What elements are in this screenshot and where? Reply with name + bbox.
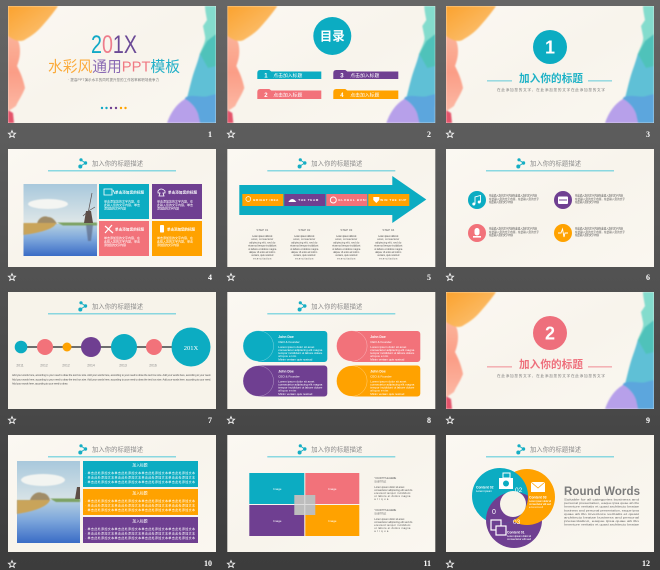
bar: orange: 加入标题 <box>132 490 148 496</box>
quadrant tiles: Image <box>328 487 337 491</box>
paragraph: Add your words here, according to your need to draw the text box size. Add your words here, according to your need to draw the text box size. Add your words here, according to your need. <box>12 373 211 377</box>
step 1 text: adipiscing elit, sed do <box>249 240 276 244</box>
step 3 text: adipiscing elit, sed do <box>333 240 360 244</box>
ring diagram: consectetur elit sed <box>529 502 551 506</box>
footer: star icon 2 <box>227 131 235 137</box>
ring diagram: Lorem ipsum <box>476 489 492 493</box>
year labels <box>16 364 157 368</box>
footer: star icon 12 <box>446 561 454 567</box>
Round Words body: business and personal presentation, eaque ipsa <box>564 508 639 512</box>
slide 11: quadrant <box>227 435 435 552</box>
item: music: 在此输入您的文字内容，在此输入您的文字 <box>489 197 539 201</box>
tile: teal: 单击添加您的文字内容，在 <box>104 198 140 204</box>
item 4: 点击加入标题 <box>350 92 380 98</box>
card teal: John Doe <box>278 335 294 339</box>
card orange: tempor incididunt ut labore dolore <box>370 386 415 390</box>
page number 10: 10 <box>204 559 212 568</box>
header: 加入你的标题描述 <box>92 444 144 453</box>
year labels: 2016 <box>149 364 157 368</box>
title 201X: 201X <box>91 31 137 59</box>
item: music: 在此输入您的文字内容 <box>489 200 513 204</box>
text block 1: ut labore et dolore magna <box>374 494 411 498</box>
tile: orange: 此输入您的文字内容，单击 <box>157 238 193 244</box>
number circle: 1 <box>545 38 555 58</box>
page number 9: 9 <box>646 416 650 425</box>
step 1 text: aliqua. Ut enim ad minim <box>249 250 275 254</box>
center overlay <box>294 495 315 515</box>
text block 1: YOUR TITLE HERE <box>374 476 396 480</box>
Round Words body: presentation, eaque ipsa quae ab illo <box>564 519 639 523</box>
ring diagram: 03 <box>513 519 521 526</box>
page number 3: 3 <box>646 130 650 139</box>
tile: orange: 单击添加您的标题 <box>167 226 196 232</box>
Round Words body: personal presentation, eaque ipsa quae ab illo <box>564 501 639 505</box>
ring diagram: Content 02 <box>476 486 494 490</box>
year labels: 2012 <box>62 364 70 368</box>
paragraph: Add your words here, according to your need to draw. <box>12 382 68 386</box>
header <box>486 444 614 457</box>
timeline: 201X <box>184 345 199 352</box>
ring diagram: Lorem ipsum dolor sit <box>529 499 551 503</box>
text block 2: Lorem ipsum dolor sit amet <box>374 517 405 521</box>
bar: teal <box>83 461 198 487</box>
header <box>48 158 176 171</box>
step 4 text: veniam, quis nostrud <box>377 253 400 257</box>
step 4 text: amet, consectetur <box>377 237 399 241</box>
item 3 <box>333 70 398 80</box>
step 3 text: exercitation <box>337 256 356 260</box>
step box 3: GLOBAL BUSI <box>338 198 366 202</box>
step 3 text: amet, consectetur <box>335 237 357 241</box>
Round Words body <box>564 498 639 527</box>
tile: teal: 添加您的文字内容 <box>104 206 126 210</box>
card salmon <box>336 331 420 362</box>
page number 2: 2 <box>427 130 431 139</box>
step 2 text: adipiscing elit, sed do <box>291 240 318 244</box>
bar: teal: · 单击此处添加文本单击此处添加文本单击此处添加文本单击此处添加文本 <box>85 479 195 484</box>
slide 5: arrow steps <box>227 149 435 267</box>
step 1 text: veniam, quis nostrud <box>251 253 274 257</box>
step 3 text: ut labore et dolore magna <box>332 247 361 251</box>
tile: salmon: 添加您的文字内容 <box>104 242 126 247</box>
text block 2: eiusmod tempor incididunt <box>374 523 411 527</box>
tile: teal <box>99 184 149 219</box>
card teal <box>243 331 327 362</box>
tile: salmon: 此输入您的文字内容，单击 <box>104 238 140 244</box>
step 3 text: eiusmod tempor incididunt <box>332 244 361 248</box>
ring diagram: Content 01 <box>507 530 525 534</box>
text block 2: aliqua <box>374 529 389 533</box>
card salmon: tempor incididunt ut labore dolore <box>370 351 415 355</box>
text block 1 <box>374 476 413 501</box>
header <box>486 158 614 171</box>
item: microphone: 在此输入您的文字内容，在此输入您的文字 <box>489 230 539 234</box>
text block 1: eiusmod tempor incididunt <box>374 491 411 495</box>
step 1 text <box>248 228 277 260</box>
bar: purple: · 单击此处添加文本单击此处添加文本单击此处添加文本单击此处添加文本 <box>85 526 195 531</box>
year labels: 2014 <box>87 364 95 368</box>
ring diagram: Lorem ipsum dolor sit <box>507 534 531 538</box>
item: mail: 在此输入您的文字内容，在此输入您的文字 <box>575 197 625 201</box>
step 3 text: veniam, quis nostrud <box>335 253 358 257</box>
item: pulse: 在此输入您的文字内容 <box>575 233 599 237</box>
card purple: aliqua enim <box>278 388 297 392</box>
card salmon: Lorem ipsum dolor sit amet <box>370 345 406 349</box>
photo: windmill landscape <box>24 184 97 256</box>
card salmon: consectetur adipiscing elit magna <box>370 348 415 352</box>
card purple: Lorem ipsum dolor sit amet <box>278 380 314 384</box>
item: pulse: 在此输入您的文字内容在此输入您的文字内容 <box>575 226 623 230</box>
bar: purple: 加入标题 <box>132 518 148 524</box>
ring diagram: Content 03 <box>529 496 547 500</box>
page number 4: 4 <box>208 273 212 282</box>
section description: 在此添加您的文字，在此添加您的文字在此添加您的文字 <box>497 373 605 378</box>
footer: star icon 10 <box>8 561 16 567</box>
Round Words heading: Round Words <box>564 486 640 498</box>
subtitle: · 提高PPT演示水平的同时提升您的工作效率和职场竞争力 <box>68 77 160 82</box>
paper <box>446 435 654 552</box>
Round Words body: Inventore veritatis et quasi architecto beatae <box>564 523 639 527</box>
tile: purple: 单击添加您的文字内容，在 <box>157 198 193 204</box>
page number 1: 1 <box>208 130 212 139</box>
card orange: Minim veniam quis nostrud <box>370 392 405 396</box>
bar: purple <box>83 517 198 543</box>
step 3 text: Lorem ipsum dolor sit <box>336 234 357 238</box>
paper <box>8 149 216 267</box>
item: mail <box>554 191 625 209</box>
bar: orange: · 单击此处添加文本单击此处添加文本单击此处添加文本单击此处添加文本 <box>85 498 195 503</box>
card orange <box>336 366 420 396</box>
card purple: Minim veniam quis nostrud <box>278 392 313 396</box>
item 2: 2 <box>264 93 268 99</box>
text block 2 <box>374 508 413 533</box>
card teal: Minim veniam quis nostrud <box>278 357 313 361</box>
item 2: 点击加入标题 <box>273 92 303 98</box>
card orange: consectetur adipiscing elit magna <box>370 382 415 386</box>
main title: 水彩风通用PPT模板 <box>48 58 180 76</box>
footer: star icon 8 <box>227 417 235 423</box>
tile: teal: 此输入您的文字内容，单击 <box>104 202 140 207</box>
tile: orange: 单击添加您的文字内容，在 <box>157 235 193 240</box>
header <box>267 444 395 457</box>
step 4 text: Lorem ipsum dolor sit <box>378 234 399 238</box>
watercolor background <box>446 6 654 123</box>
card teal: aliqua enim <box>278 354 297 358</box>
page number 6: 6 <box>646 273 650 282</box>
header: 加入你的标题描述 <box>530 444 582 453</box>
footer: star icon 11 <box>227 561 235 567</box>
tile: salmon: 单击添加您的文字内容，在 <box>104 235 140 240</box>
paper <box>446 149 654 267</box>
footer: star icon 5 <box>227 274 235 280</box>
Round Words body: Suitable for all categories business and <box>564 498 639 502</box>
number circle: 2 <box>545 324 555 344</box>
footer: star icon 7 <box>8 417 16 423</box>
step box 1: BRIGHT IDEA <box>253 198 279 202</box>
header: 加入你的标题描述 <box>311 158 363 167</box>
card salmon: aliqua enim <box>370 354 389 358</box>
text block 2: ut labore et dolore magna <box>374 526 411 530</box>
header: 加入你的标题描述 <box>92 158 144 167</box>
year labels: 2011 <box>16 364 24 368</box>
tile: salmon <box>99 221 149 256</box>
header <box>48 301 176 314</box>
page number 7: 7 <box>208 416 212 425</box>
step box 4 <box>368 194 409 206</box>
card teal: tempor incididunt ut labore dolore <box>278 351 323 355</box>
slide 9: section 2 <box>446 292 654 409</box>
item: mail: 在此输入您的文字内容 <box>575 200 599 204</box>
page number 11: 11 <box>423 559 431 568</box>
step box 2: THE TEAM <box>298 198 319 202</box>
header: 加入你的标题描述 <box>530 158 582 167</box>
slide 10: photo and bars <box>8 435 216 552</box>
footer: star icon 3 <box>446 131 454 137</box>
bar: orange: · 单击此处添加文本单击此处添加文本单击此处添加文本单击此处添加文本 <box>85 507 195 512</box>
text block 2: YOUR TITLE HERE <box>374 508 396 512</box>
item 1: 1 <box>264 74 268 80</box>
header <box>267 301 395 314</box>
slide 1: cover <box>8 6 216 123</box>
watercolor background <box>227 6 435 123</box>
step 1 text: Lorem ipsum dolor sit <box>252 234 273 238</box>
card salmon: Minim veniam quis nostrud <box>370 357 405 361</box>
bar: orange: · 单击此处添加文本单击此处添加文本单击此处添加文本单击此处添加文本 <box>85 502 195 508</box>
card teal: consectetur adipiscing elit magna <box>278 348 323 352</box>
step 2 text <box>290 228 319 260</box>
step 2 text: STEP 02 <box>298 228 311 232</box>
item: microphone: 在此输入您的文字内容在此输入您的文字内容 <box>489 226 537 230</box>
section heading: 加入你的标题 <box>519 358 583 371</box>
text block 1: Lorem ipsum dolor sit amet <box>374 485 405 489</box>
ring diagram: eiusmod <box>529 505 543 509</box>
card orange: John Doe <box>370 370 386 374</box>
item 4: 4 <box>340 93 344 99</box>
step 4 text: ut labore et dolore magna <box>374 247 403 251</box>
tile: orange <box>152 221 202 256</box>
number circle <box>533 316 567 350</box>
header: 加入你的标题描述 <box>311 301 363 310</box>
big arrow <box>239 176 426 223</box>
page number 12: 12 <box>642 559 650 568</box>
item: microphone <box>468 224 539 242</box>
step 3 text: aliqua. Ut enim ad minim <box>333 250 359 254</box>
item: mail: 在此输入您的文字内容在此输入您的文字内容 <box>575 194 623 198</box>
step 4 text: eiusmod tempor incididunt <box>374 244 403 248</box>
card teal: CEO & Founder <box>278 340 300 344</box>
watercolor background <box>446 292 654 409</box>
Round Words body: quae ab illo inventore veritatis et quasi <box>564 512 639 516</box>
page number 5: 5 <box>427 273 431 282</box>
quadrant tiles: Image <box>328 519 337 523</box>
step 4 text: exercitation <box>379 256 398 260</box>
step 2 text: aliqua. Ut enim ad minim <box>291 250 317 254</box>
step 1 text: ut labore et dolore magna <box>248 247 277 251</box>
ring diagram: 0 <box>492 509 496 516</box>
item: pulse <box>554 224 625 242</box>
item 3: 3 <box>340 74 344 80</box>
tile: purple: 添加您的文字内容 <box>157 206 179 210</box>
footer: star icon 9 <box>446 417 454 423</box>
card purple: CEO & Founder <box>278 374 300 378</box>
header: 加入你的标题描述 <box>311 444 363 453</box>
step 4 text: STEP 04 <box>382 228 395 232</box>
year labels: 2012 <box>40 364 48 368</box>
slide 6: four icons <box>446 149 654 267</box>
card purple <box>243 366 327 396</box>
step 3 text <box>332 228 361 260</box>
paper <box>8 292 216 409</box>
bar: teal: · 单击此处添加文本单击此处添加文本单击此处添加文本单击此处添加文本 <box>85 474 195 480</box>
watercolor background <box>8 6 216 123</box>
slide 7: timeline <box>8 292 216 409</box>
step 1 text: amet, consectetur <box>251 237 273 241</box>
slide 12: round words <box>446 435 654 552</box>
card orange: CEO & Founder <box>370 374 392 378</box>
paragraph: Add your words here, according to your need to draw the text box size. Add your words here, according to your need to draw the text box size. Add your words here, according to your need. <box>12 377 211 381</box>
quadrant tiles <box>249 473 359 536</box>
step 4 text: aliqua. Ut enim ad minim <box>375 250 401 254</box>
section heading <box>487 72 612 85</box>
footer: star icon 4 <box>8 274 16 280</box>
bar: orange <box>83 489 198 515</box>
text block 1: consectetur adipiscing elit sed do <box>374 488 413 492</box>
paper <box>227 292 435 409</box>
tile: purple: 单击添加您的标题 <box>168 189 198 194</box>
card orange: aliqua enim <box>370 388 389 392</box>
card purple: consectetur adipiscing elit magna <box>278 382 323 386</box>
paper <box>227 149 435 267</box>
step 1 text: eiusmod tempor incididunt <box>248 244 277 248</box>
tile: teal: 单击添加您的标题 <box>115 189 144 194</box>
step box 4: WIN THE CUP <box>380 198 406 202</box>
photo: river landscape <box>17 461 80 543</box>
footer: star icon 1 <box>8 131 16 137</box>
bar: teal: 加入标题 <box>132 462 148 468</box>
quadrant tiles: Image <box>273 519 282 523</box>
timeline <box>15 328 211 366</box>
year labels: 2013 <box>119 364 127 368</box>
card purple: tempor incididunt ut labore dolore <box>278 386 323 390</box>
item 3: 点击加入标题 <box>350 72 380 79</box>
bar: teal: · 单击此处添加文本单击此处添加文本单击此处添加文本单击此处添加文本 <box>85 470 195 475</box>
header: 加入你的标题描述 <box>92 301 144 310</box>
slide 8: four cards <box>227 292 435 409</box>
ring diagram: 02 <box>515 487 523 494</box>
item 2 <box>257 89 321 99</box>
slide 3: section 1 <box>446 6 654 123</box>
paper <box>227 435 435 552</box>
header <box>267 158 395 171</box>
tile: salmon: 单击添加您的标题 <box>115 226 144 232</box>
bar: purple: · 单击此处添加文本单击此处添加文本单击此处添加文本单击此处添加文本 <box>85 530 195 536</box>
step box 1 <box>242 194 283 206</box>
section heading: 加入你的标题 <box>519 72 583 85</box>
text block 1: SUBTITLE <box>374 480 386 484</box>
quadrant tiles: Image <box>273 487 282 491</box>
ring diagram: consectetur elit sed <box>507 537 531 541</box>
Round Words body: architecto beatae business and personal <box>564 516 639 520</box>
step box 3 <box>326 194 367 206</box>
step 2 text: ut labore et dolore magna <box>290 247 319 251</box>
step 4 text: adipiscing elit, sed do <box>375 240 402 244</box>
step 1 text: exercitation <box>253 256 272 260</box>
card orange: Lorem ipsum dolor sit amet <box>370 380 406 384</box>
decorative dots <box>101 107 127 109</box>
step 2 text: amet, consectetur <box>293 237 315 241</box>
section description: 在此添加您的文字，在此添加您的文字在此添加您的文字 <box>497 87 605 92</box>
header <box>48 444 176 457</box>
item: music: 在此输入您的文字内容在此输入您的文字内容 <box>489 194 537 198</box>
step box 2 <box>284 194 325 206</box>
item 4 <box>333 89 398 99</box>
item: music <box>468 191 539 209</box>
contents circle <box>313 17 351 55</box>
step 3 text: STEP 03 <box>340 228 353 232</box>
step 2 text: veniam, quis nostrud <box>293 253 316 257</box>
paragraph <box>12 373 211 386</box>
item 1: 点击加入标题 <box>273 72 303 79</box>
tile: purple: 此输入您的文字内容，单击 <box>157 202 193 207</box>
Round Words body: Inventore veritatis et quasi architecto beatae <box>564 505 639 509</box>
text block 2: SUBTITLE <box>374 512 386 516</box>
card teal: Lorem ipsum dolor sit amet <box>278 345 314 349</box>
step 1 text: STEP 01 <box>256 228 269 232</box>
card purple: John Doe <box>278 370 294 374</box>
item: microphone: 在此输入您的文字内容 <box>489 233 513 237</box>
slide 4: photo and tiles <box>8 149 216 267</box>
number circle <box>533 30 567 64</box>
step 2 text: eiusmod tempor incididunt <box>290 244 319 248</box>
bar: purple: · 单击此处添加文本单击此处添加文本单击此处添加文本单击此处添加文本 <box>85 535 195 540</box>
step 2 text: exercitation <box>295 256 314 260</box>
footer: star icon 6 <box>446 274 454 280</box>
ring diagram <box>472 468 555 548</box>
tile: purple <box>152 184 202 219</box>
tile: orange: 添加您的文字内容 <box>157 242 179 247</box>
paper <box>8 435 216 552</box>
slide 2: contents <box>227 6 435 123</box>
contents circle: 目录 <box>320 30 345 44</box>
section heading <box>487 358 612 371</box>
step 4 text <box>374 228 403 260</box>
card salmon: John Doe <box>370 335 386 339</box>
page number 8: 8 <box>427 416 431 425</box>
step 2 text: Lorem ipsum dolor sit <box>294 234 315 238</box>
text block 2: consectetur adipiscing elit sed do <box>374 520 413 524</box>
item: pulse: 在此输入您的文字内容，在此输入您的文字 <box>575 230 625 234</box>
card salmon: CEO & Founder <box>370 340 392 344</box>
item 1 <box>257 70 321 80</box>
text block 1: aliqua <box>374 497 389 501</box>
